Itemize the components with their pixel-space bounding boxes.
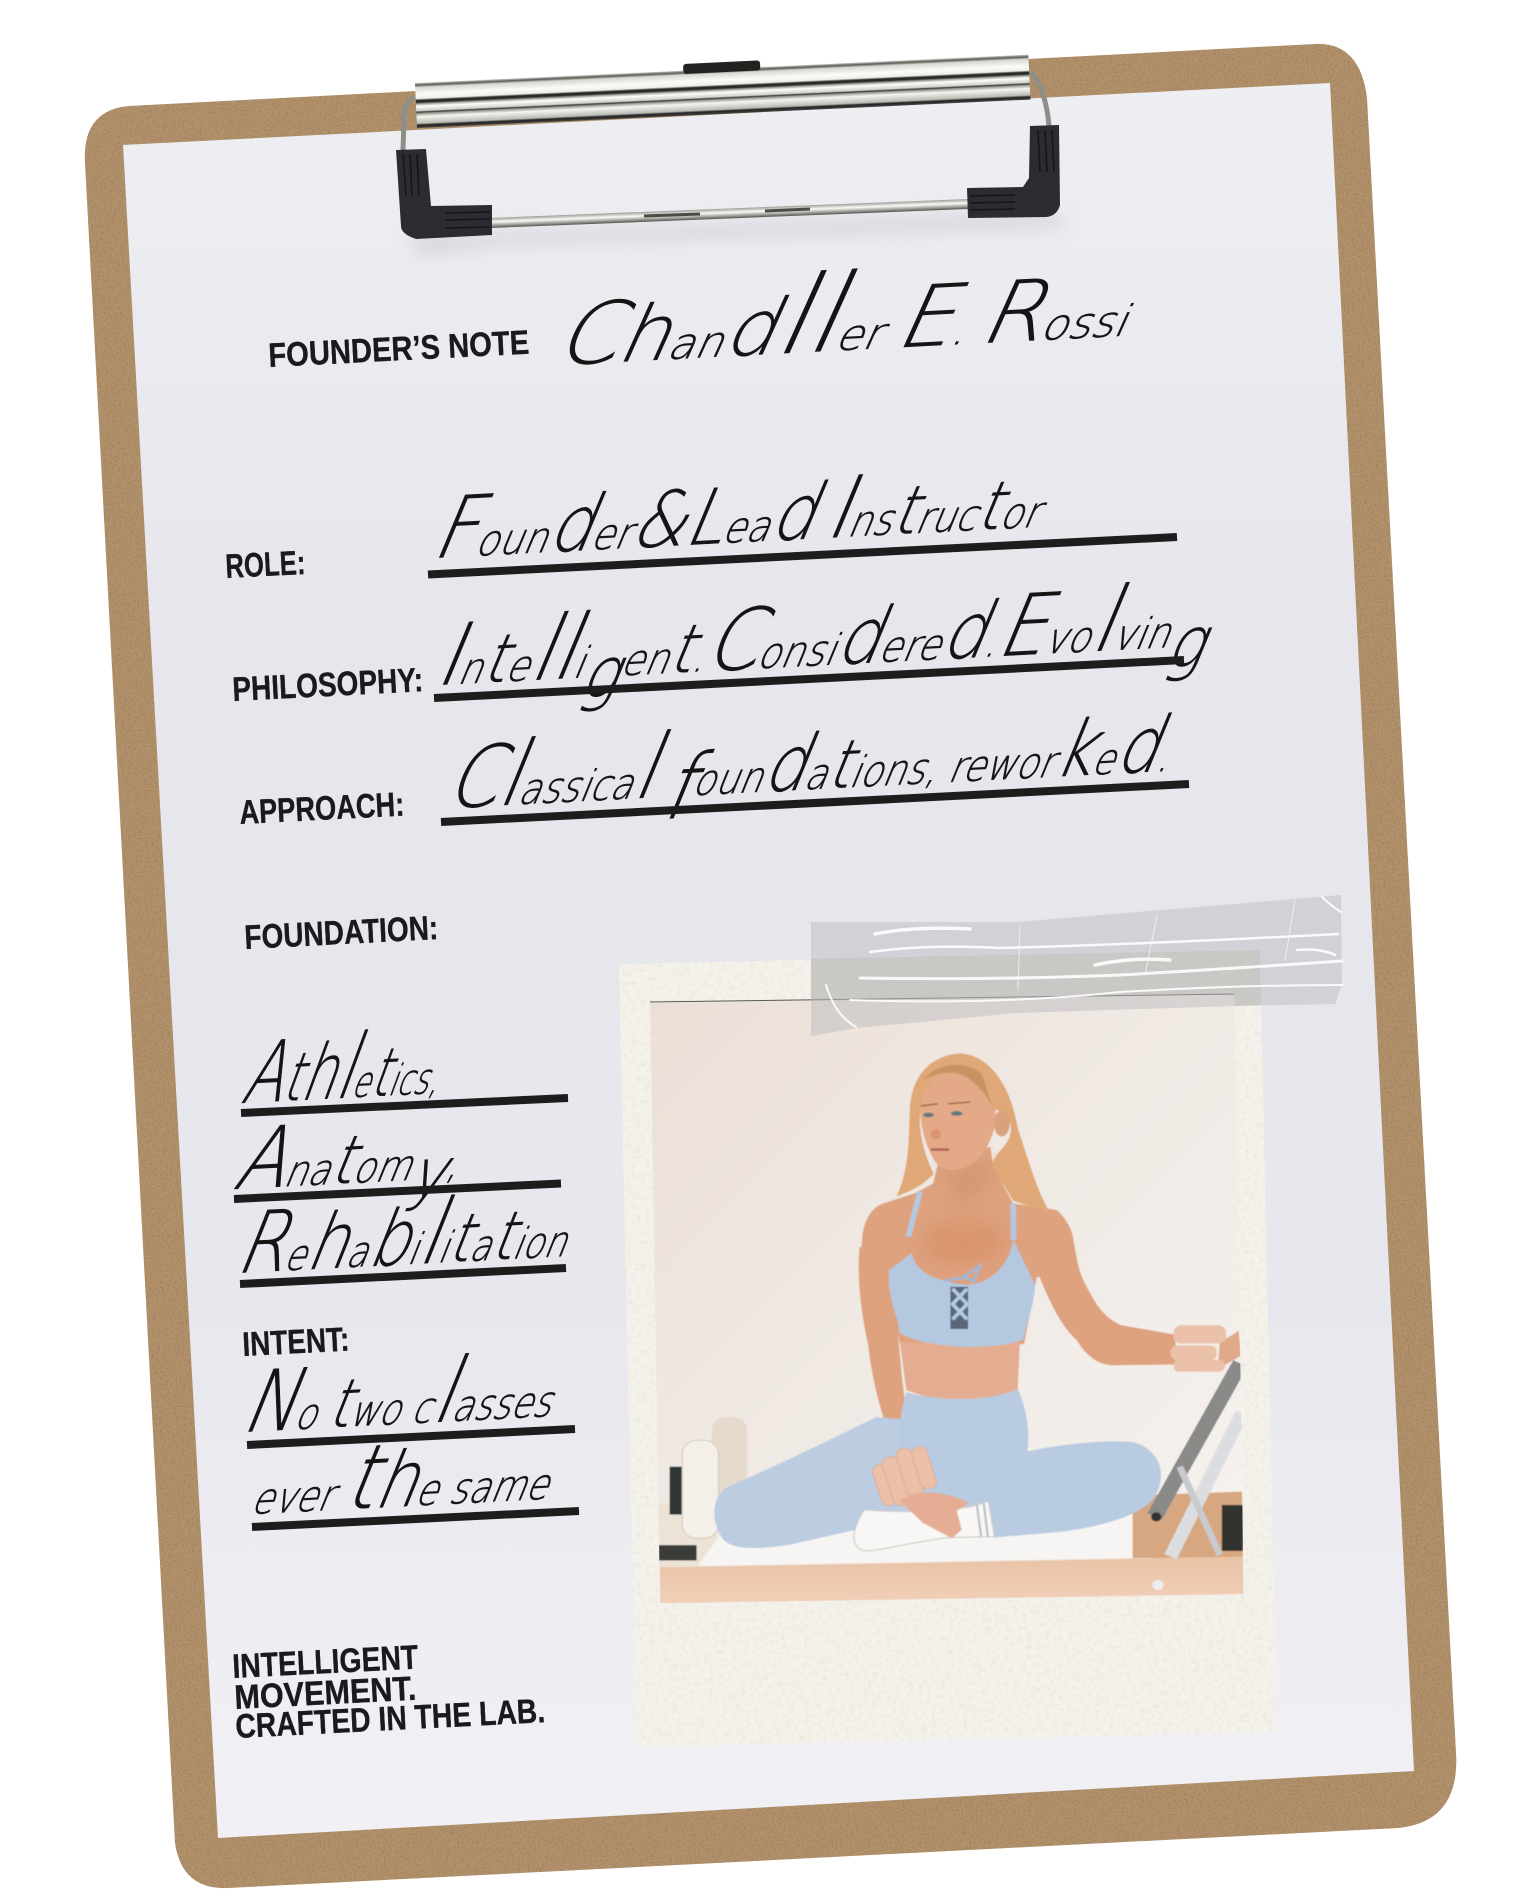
clip shadow [410, 214, 1062, 254]
reformer metal frame [1151, 1363, 1243, 1557]
underline: anatomy [234, 1184, 561, 1199]
mouth [931, 1148, 949, 1151]
handwriting: approach: o [689, 755, 722, 806]
metal clip [396, 55, 1062, 254]
hair [897, 1053, 1050, 1213]
leggings far leg [714, 1416, 910, 1548]
clip wires [403, 72, 1049, 150]
handwriting: anatomy: y [403, 1133, 459, 1215]
sock [854, 1501, 995, 1551]
paper sheet [123, 83, 1414, 1838]
handwriting: ever the same: ever the same [246, 1417, 564, 1536]
handwriting: name: Chandller E. Rossi [548, 237, 1147, 391]
leggings waist and near leg [899, 1389, 1161, 1538]
face [920, 1068, 996, 1170]
underline: role [428, 537, 1177, 574]
tagline: INTELLIGENT [231, 1638, 419, 1686]
polaroid photo [619, 950, 1277, 1747]
label: founder's note: FOUNDER’S NOTE [267, 324, 530, 375]
handwriting: approach: Classical [440, 715, 671, 829]
handwriting: philosophy: g [1161, 603, 1217, 684]
underline: philosophy [434, 660, 1184, 698]
resting hand [900, 1493, 969, 1538]
right clip handle [967, 125, 1060, 218]
reformer wood rail [660, 1557, 1244, 1603]
neck shadow [956, 1158, 994, 1192]
label: foundation: FOUNDATION: [243, 909, 439, 957]
tape strip [811, 895, 1342, 1036]
wall [650, 994, 1244, 1603]
wood rail bolt [1152, 1580, 1163, 1590]
handwriting: philosophy: Intelli [430, 596, 592, 706]
her right arm [858, 1246, 905, 1420]
upper body [862, 1147, 1073, 1344]
clip pivot [683, 60, 760, 74]
label: approach: APPROACH: [238, 786, 405, 832]
polaroid frame [619, 950, 1277, 1747]
reformer back wood [1133, 1492, 1243, 1558]
handwriting: approach: f [655, 735, 718, 841]
underline: approach [441, 784, 1189, 822]
hair crown shading [923, 1065, 992, 1107]
tape highlights [826, 897, 1342, 1027]
reformer carriage [698, 1531, 1036, 1566]
tagline: MOVEMENT. [233, 1670, 417, 1717]
handwriting: philosophy: g [575, 633, 632, 715]
handwriting: role: Founder&Lead Instructor [426, 449, 1058, 579]
wrist weight left [871, 1445, 938, 1507]
her left arm [1037, 1239, 1176, 1365]
underline: no two classes [247, 1429, 575, 1445]
handwriting: philosophy: e [617, 635, 652, 686]
handwriting: athletics: Athletics, [236, 1011, 453, 1125]
polaroid band under tape [811, 950, 1261, 1006]
clip bar [415, 55, 1030, 128]
clip rod dent [644, 209, 810, 216]
bra straps [908, 1192, 1014, 1240]
abdomen [900, 1342, 1020, 1402]
underline: rehabilitation [240, 1268, 566, 1284]
ear [994, 1110, 1010, 1136]
chest tan [921, 1220, 1005, 1266]
hand on frame [1218, 1330, 1240, 1366]
handwriting: approach: undations, reworked. [712, 700, 1176, 811]
label: philosophy: PHILOSOPHY: [231, 661, 424, 709]
handwriting: anatomy: , [443, 1139, 464, 1189]
handwriting: philosophy: nt.Considered.Evolvin [641, 568, 1181, 692]
underline: athletics [241, 1098, 568, 1113]
handwriting: rehabilitation: Rehabilitation [230, 1174, 581, 1295]
tagline [231, 1638, 546, 1746]
sports bra [889, 1240, 1035, 1347]
eyes [921, 1102, 970, 1117]
handwriting: anatomy: Anatom [228, 1108, 425, 1210]
reformer left equipment [659, 1417, 747, 1567]
bra lacing [944, 1266, 980, 1329]
handwriting: no two classes: No two classes [236, 1334, 567, 1454]
tagline: CRAFTED IN THE LAB. [234, 1692, 546, 1746]
clip rod [490, 199, 968, 228]
nose [931, 1129, 941, 1140]
label: intent: INTENT: [241, 1321, 350, 1364]
photograph top edge [650, 994, 1234, 1002]
photograph [650, 994, 1244, 1603]
label: role: ROLE: [224, 544, 306, 586]
left clip handle [396, 149, 492, 239]
underline: ever the same [252, 1511, 579, 1527]
wrist weight right [1171, 1325, 1226, 1372]
